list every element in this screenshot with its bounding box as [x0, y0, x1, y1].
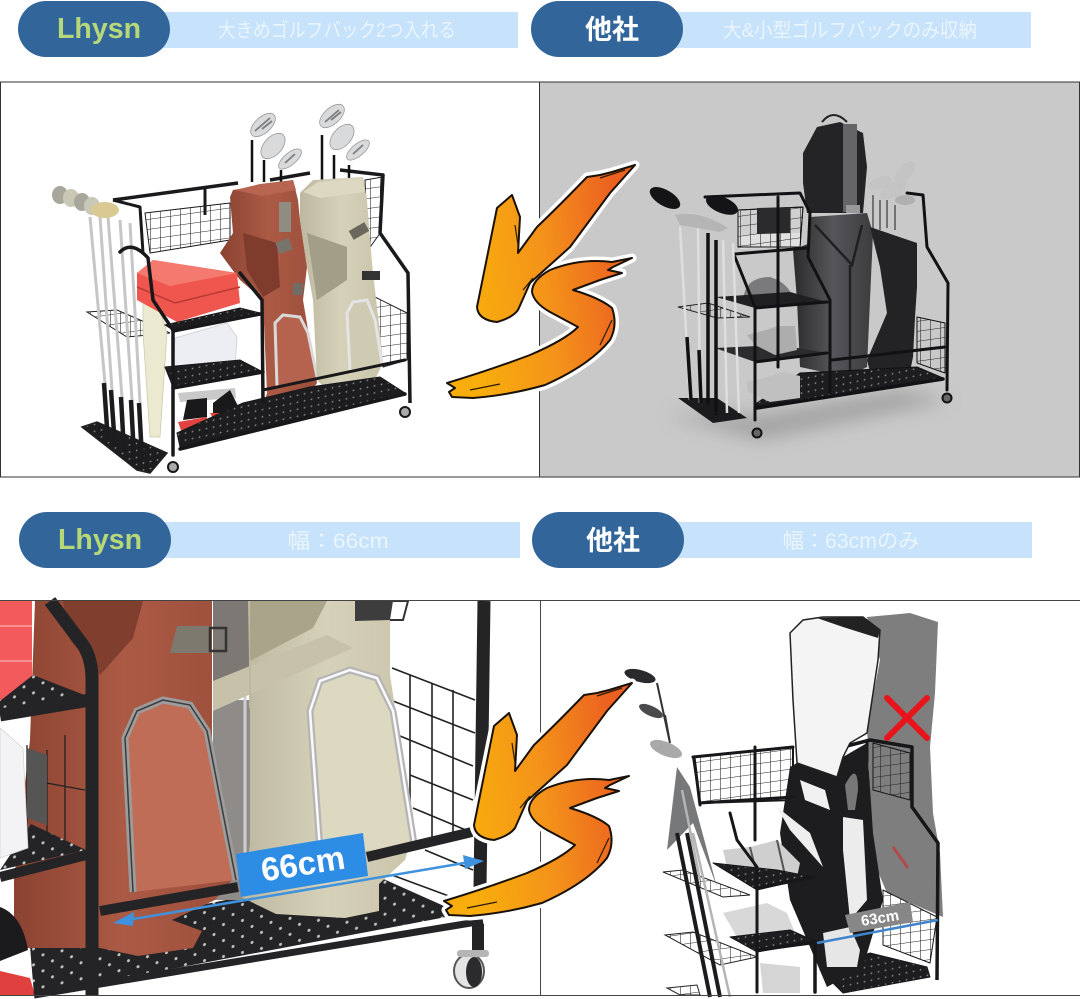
- icon: clubs and side stand: [52, 186, 170, 473]
- bar: Lhysn width: 幅：66cm: [288, 530, 388, 553]
- arrow: width dimension: [113, 855, 484, 926]
- icon: red shoe boxes: [137, 260, 240, 322]
- panel: competitor width close-up: [540, 600, 1080, 997]
- pill: Lhysn: Lhysn: [58, 524, 142, 556]
- bar: Lhysn width: [160, 522, 520, 558]
- bar: competitor capacity: [670, 12, 1031, 48]
- arrow: width line: [817, 920, 938, 943]
- panel: competitor rack on grey background: [540, 82, 1080, 477]
- icon: small black bag: [867, 227, 917, 372]
- header row 1: competitor: [531, 1, 1031, 57]
- icon: red golf bag: [220, 180, 317, 407]
- icon: club heads above bags: [246, 100, 373, 182]
- header row 2: Lhysn: [19, 512, 520, 568]
- icon: central bag with white hood: [777, 617, 883, 987]
- icon: black rack front shelves: [693, 747, 817, 992]
- icon: white box and shoes: [173, 323, 240, 433]
- pill: Lhysn: Lhysn: [57, 13, 141, 45]
- graphic: VS emblem, first row: [447, 165, 635, 398]
- icon: wire baskets and rear frame: [693, 740, 938, 993]
- bar: competitor capacity: 大&小型ゴルフバックのみ収納: [723, 19, 977, 42]
- icon: silver club heads: [867, 158, 919, 230]
- pill: Lhysn: [18, 1, 170, 57]
- header row 2: competitor: [532, 512, 1032, 568]
- pill: Lhysn: [19, 512, 171, 568]
- bar: Lhysn capacity: [160, 12, 518, 48]
- icon: beige golf bag: [300, 177, 383, 390]
- panel: Lhysn rack with two large bags: [0, 82, 540, 477]
- icon: red box: [0, 601, 32, 700]
- icon: beige golf bag close-up: [213, 601, 415, 918]
- icon: left shelves, box and shoes: [0, 675, 87, 995]
- icon: tall black travel bag: [793, 115, 873, 377]
- icon: thick black rack frame: [0, 601, 484, 995]
- panel: Lhysn width close-up: [0, 600, 540, 995]
- pill: competitor: 他社: [586, 526, 640, 556]
- bar: competitor width: 幅：63cmのみ: [782, 530, 920, 553]
- icon: caster wheel: [454, 950, 489, 988]
- pill: competitor: [532, 512, 684, 568]
- label: 63cm: 63cm: [860, 907, 900, 930]
- header row 1: Lhysn: [18, 1, 518, 57]
- icon: background behind bags: [213, 601, 253, 900]
- bar: Lhysn capacity: 大きめゴルフバック2つ入れる: [218, 19, 456, 42]
- floor shadow: [665, 390, 950, 440]
- bar: competitor width: [672, 522, 1032, 558]
- icon: clubs in side stand: [646, 183, 750, 423]
- icon: red golf bag close-up: [14, 601, 236, 956]
- icon: grey excluded bag: [867, 613, 943, 917]
- pill: competitor: 他社: [585, 15, 639, 45]
- icon: rack shelves, base and wheels: [120, 247, 410, 472]
- icon: red X: [887, 698, 927, 738]
- label: 66cm: 66cm: [258, 839, 347, 888]
- pill: competitor: [531, 1, 683, 57]
- divider lines for lower panels: [0, 600, 1080, 996]
- icon: shoes on shelves: [723, 840, 860, 993]
- label: 66cm: [236, 833, 368, 897]
- icon: rack back frame and wire basket: [113, 170, 410, 403]
- label: 63cm: [845, 902, 913, 933]
- icon: clubs to left of rack: [623, 666, 757, 997]
- graphic: VS emblem, second row: [444, 683, 632, 916]
- icon: rack basket, shelves and frame: [705, 193, 952, 438]
- icon: side wire grid: [392, 668, 475, 905]
- icon: perforated base shelf: [29, 877, 462, 995]
